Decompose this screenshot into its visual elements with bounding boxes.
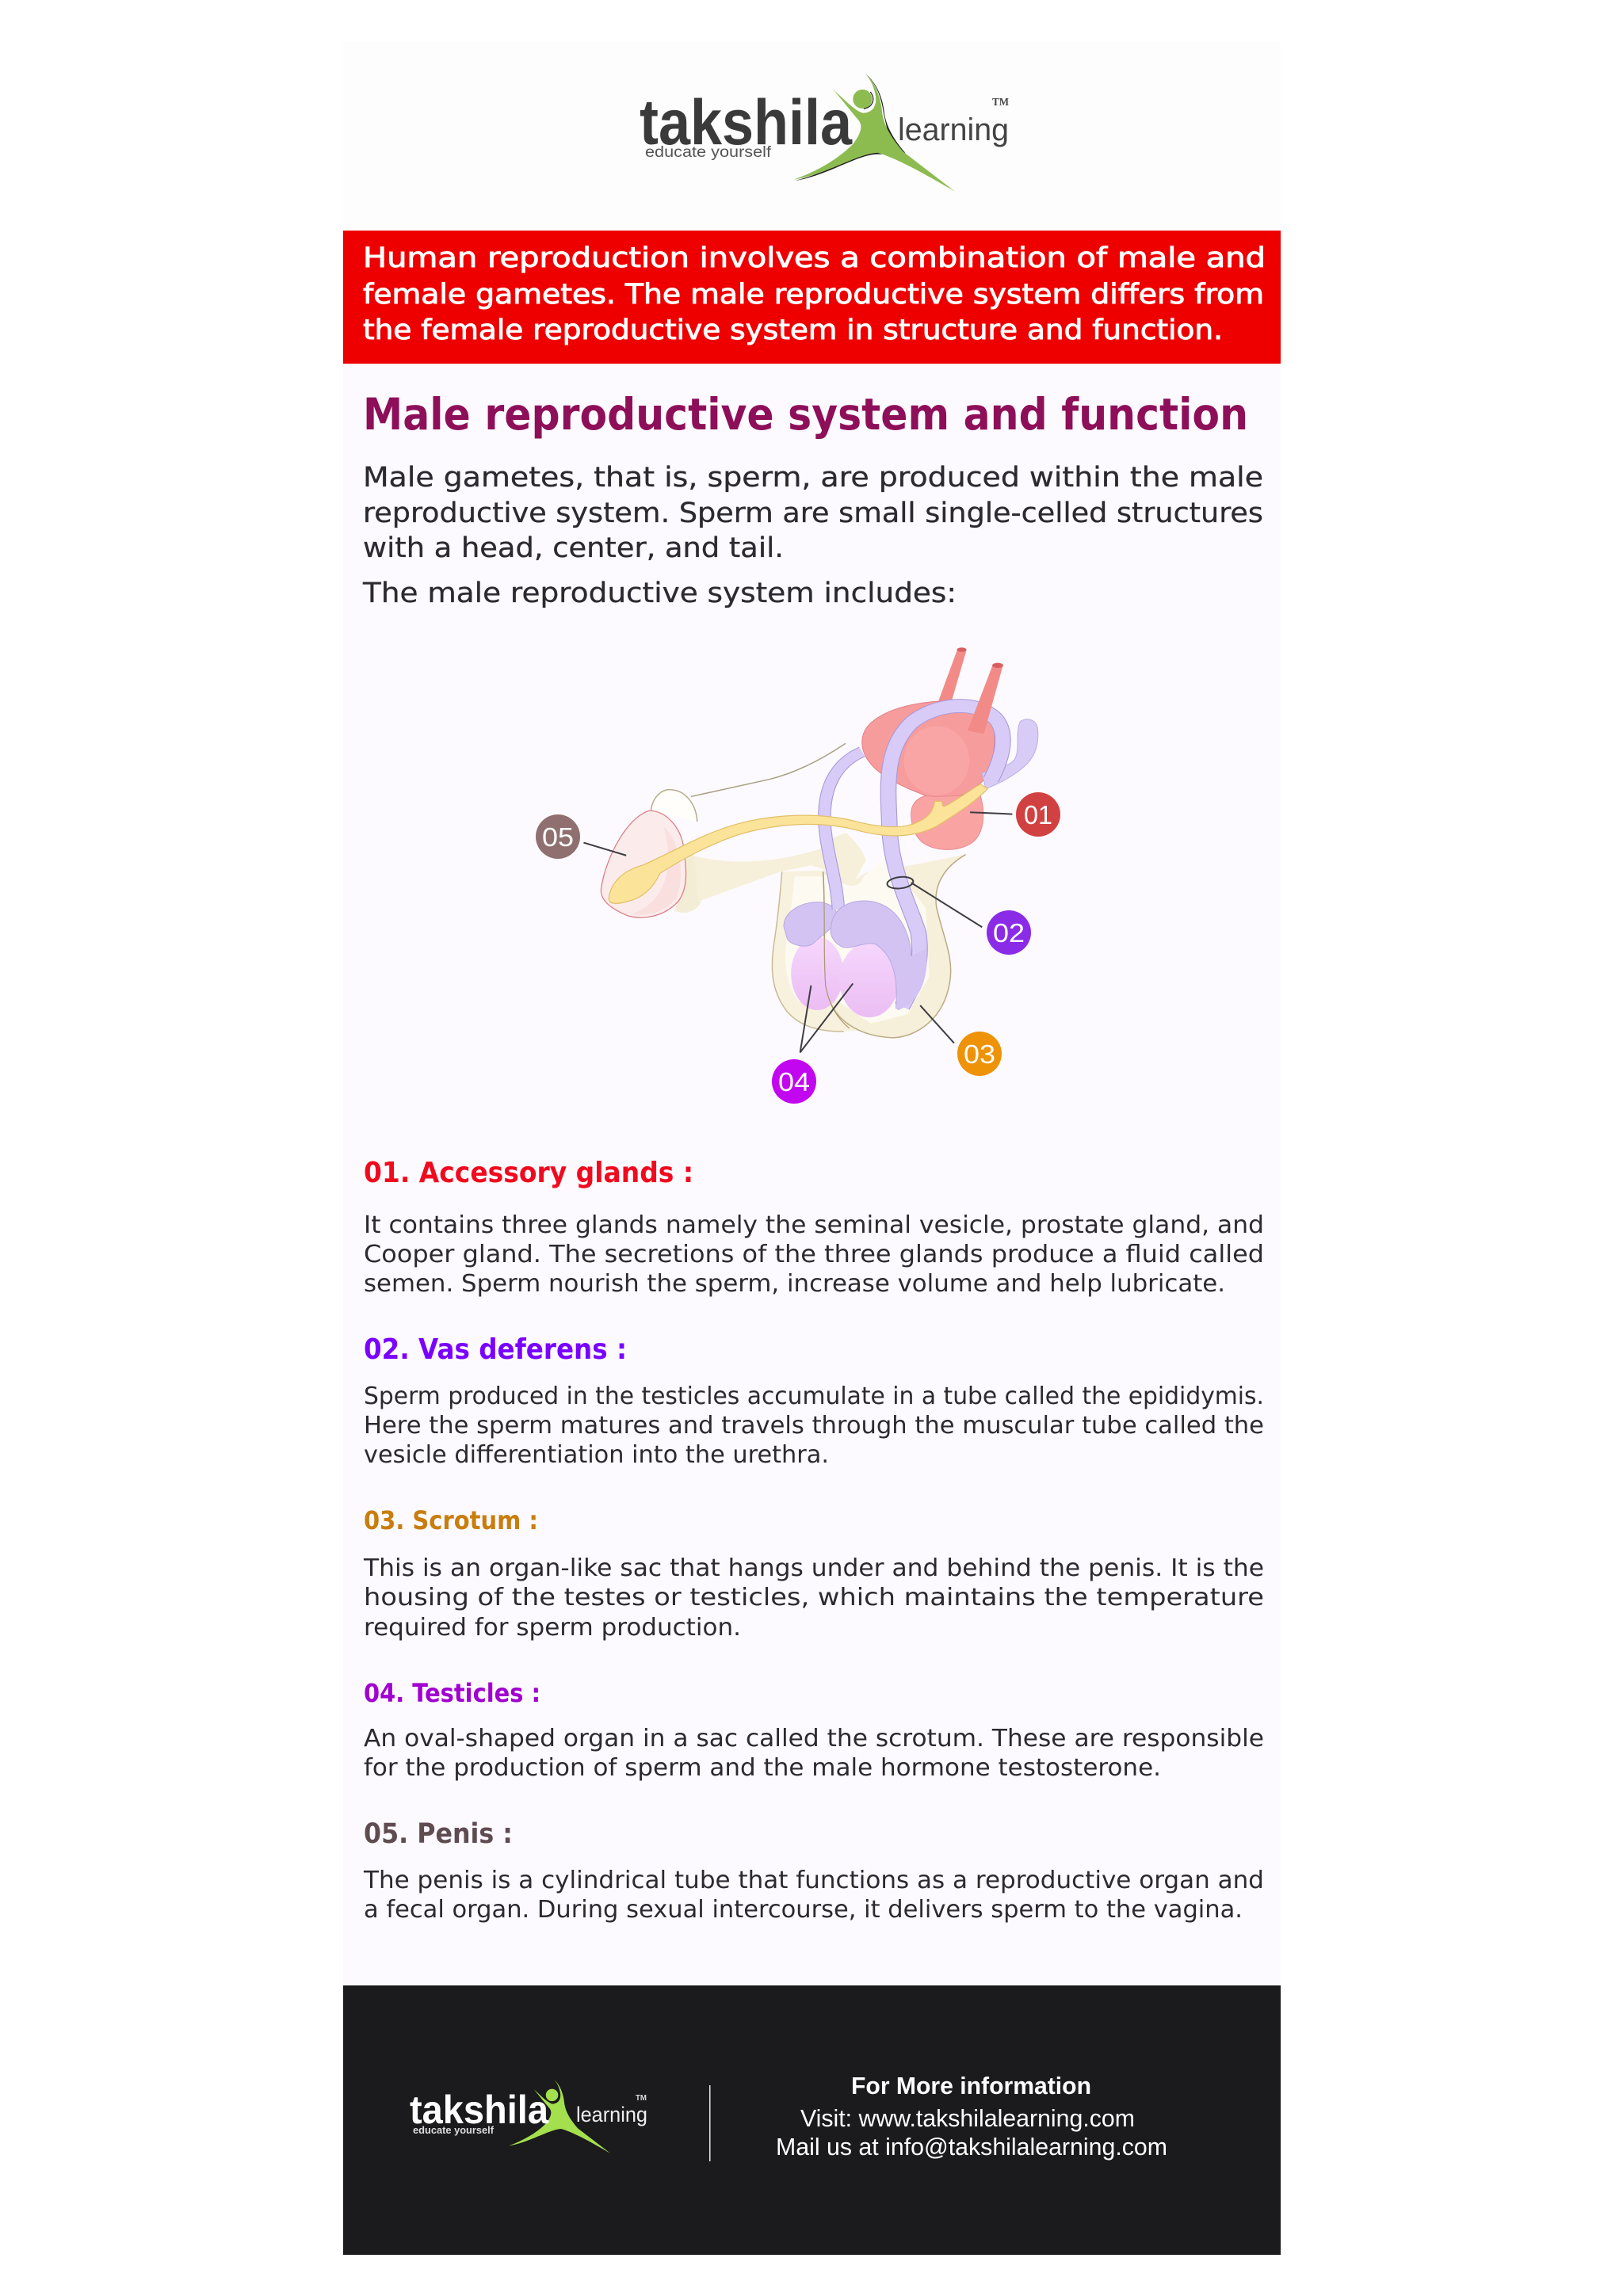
section 04 testicles: 04. Testicles :: [364, 1678, 540, 1708]
left epididymis: [784, 902, 837, 946]
section 05 penis: [363, 1818, 1264, 1924]
glans: [601, 810, 686, 917]
intro paragraph: reproductive system. Sperm are small single-celled structures: [363, 498, 1263, 529]
section 04 testicles: An oval-shaped organ in a sac called the scrotum. These are responsible: [364, 1725, 1264, 1753]
logo wordmark: takshila: [640, 87, 853, 158]
contact information: [776, 2072, 1167, 2161]
foreskin ring shading: [674, 849, 701, 913]
footer wordmark: takshila: [410, 2088, 549, 2132]
callout 03: [957, 1032, 1002, 1076]
left vas deferens: [824, 752, 862, 910]
callout 01: 01: [1024, 800, 1052, 830]
right epididymis: [831, 901, 915, 1009]
section 01 accessory glands: [364, 1157, 1264, 1298]
contact information: Visit: www.takshilalearning.com: [800, 2104, 1135, 2132]
footer subword: learning: [576, 2103, 647, 2126]
urethra: [609, 784, 987, 903]
intro red banner: [343, 231, 1281, 364]
intro red banner: the female reproductive system in structure and function.: [363, 315, 1223, 346]
contact information: For More information: [851, 2072, 1091, 2100]
callout 05: [536, 814, 580, 859]
footer logo figure: [509, 2079, 610, 2153]
scrotal septum: [823, 871, 850, 1028]
section 01 accessory glands: 01. Accessory glands :: [364, 1157, 693, 1189]
seminal vesicle: [982, 719, 1038, 789]
callout 02: [987, 910, 1031, 955]
intro paragraph: with a head, center, and tail.: [363, 532, 784, 564]
bladder highlight: [904, 726, 969, 795]
callout 04: 04: [778, 1067, 810, 1097]
anatomy diagram: [536, 647, 1060, 1104]
footer tagline: educate yourself: [413, 2125, 495, 2136]
intro paragraph: Male gametes, that is, sperm, are produced within the male: [363, 462, 1263, 494]
prostate gland: [911, 795, 983, 849]
right ureter: [968, 664, 1002, 734]
section 02 vas deferens: [364, 1333, 1264, 1469]
callout 01: [1016, 792, 1060, 837]
contact information: Mail us at info@takshilalearning.com: [776, 2133, 1167, 2161]
bladder: [862, 701, 995, 800]
section 05 penis: The penis is a cylindrical tube that functions as a reproductive organ and: [363, 1867, 1264, 1894]
callout 02: 02: [993, 918, 1025, 948]
section 04 testicles: [364, 1678, 1264, 1782]
shaft outline: [691, 743, 846, 796]
intro red banner: female gametes. The male reproductive system differs from: [363, 279, 1264, 311]
section 03 scrotum: housing of the testes or testicles, which maintains the temperature: [364, 1584, 1264, 1611]
section 01 accessory glands: semen. Sperm nourish the sperm, increase volume and help lubricate.: [364, 1270, 1225, 1298]
logo subword: learning: [898, 113, 1009, 147]
logo tagline: educate yourself: [645, 144, 772, 161]
main heading: Male reproductive system and function: [363, 389, 1248, 440]
logo figure: [794, 74, 955, 192]
shaft shading: [694, 847, 837, 902]
header logo: [640, 74, 1009, 192]
trademark: TM: [992, 97, 1009, 109]
footer logo: [410, 2079, 647, 2153]
section 01 accessory glands: It contains three glands namely the seminal vesicle, prostate gland, and: [364, 1211, 1264, 1239]
section 03 scrotum: [363, 1505, 1264, 1642]
footer trademark: TM: [636, 2094, 647, 2103]
section 02 vas deferens: 02. Vas deferens :: [364, 1333, 627, 1366]
leader lines: [583, 812, 1012, 1052]
right vas deferens: [888, 706, 1003, 1006]
section 01 accessory glands: Cooper gland. The secretions of the three glands produce a fluid called: [364, 1241, 1264, 1268]
section 02 vas deferens: Here the sperm matures and travels through the muscular tube called the: [364, 1412, 1264, 1440]
intro red banner: Human reproduction involves a combination of male and: [363, 242, 1266, 274]
intro paragraph: [363, 462, 1263, 564]
list lead-in: The male reproductive system includes:: [362, 578, 957, 609]
section 02 vas deferens: Sperm produced in the testicles accumulate in a tube called the epididymis.: [364, 1383, 1264, 1410]
footer panel: [343, 1985, 1281, 2255]
callout 04: [772, 1059, 816, 1104]
foreskin fold: [651, 790, 697, 822]
back sac: [772, 870, 871, 1032]
section 02 vas deferens: vesicle differentiation into the urethra.: [364, 1441, 829, 1469]
section 03 scrotum: This is an organ-like sac that hangs under and behind the penis. It is the: [363, 1554, 1264, 1582]
section 04 testicles: for the production of sperm and the male hormone testosterone.: [364, 1754, 1161, 1782]
callout 05: 05: [542, 822, 574, 852]
diagram illustration: [583, 647, 1038, 1052]
left testicle: [791, 937, 843, 1010]
section 05 penis: 05. Penis :: [364, 1818, 513, 1850]
section 03 scrotum: 03. Scrotum :: [364, 1505, 538, 1535]
front sac: [823, 855, 966, 1038]
right testicle: [839, 942, 899, 1017]
epididymis tail: [896, 948, 927, 1009]
vas deferens ring: [886, 875, 914, 890]
callout 03: 03: [964, 1039, 995, 1069]
section 05 penis: a fecal organ. During sexual intercourse, it delivers sperm to the vagina.: [364, 1896, 1243, 1924]
section 03 scrotum: required for sperm production.: [364, 1614, 741, 1642]
left ureter: [938, 648, 967, 703]
